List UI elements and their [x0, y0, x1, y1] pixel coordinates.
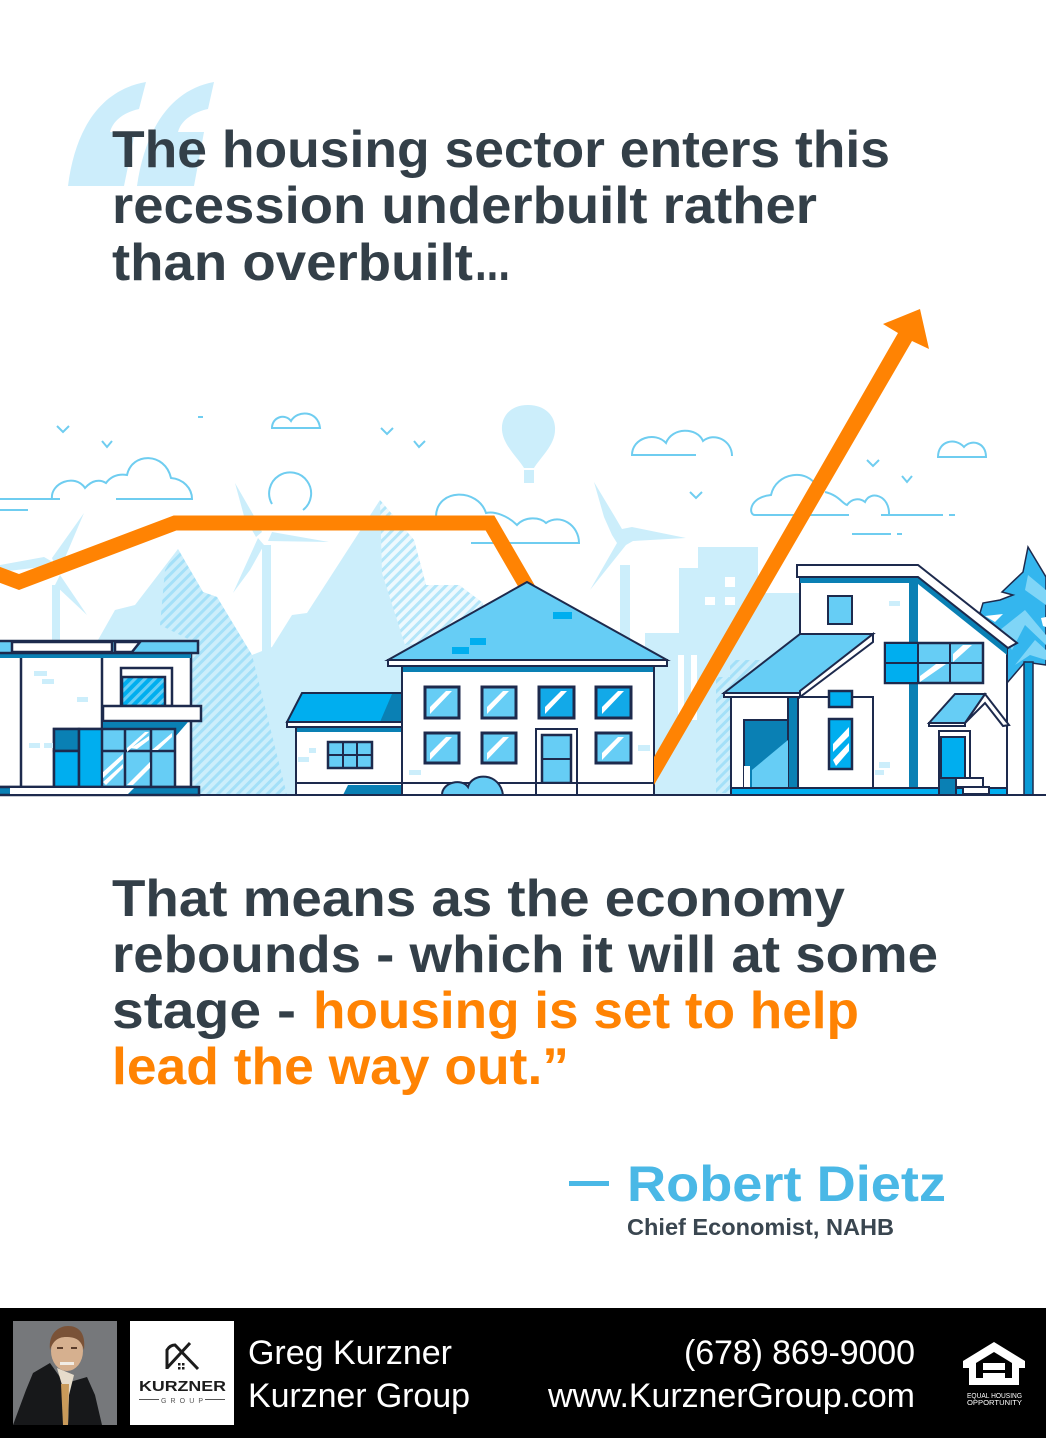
flat roof — [0, 641, 198, 653]
building: center house — [388, 582, 667, 795]
icon: equal housing opportunity — [963, 1342, 1025, 1407]
heading quote: The housing sector enters this — [112, 121, 890, 179]
hot air balloon — [502, 405, 555, 483]
chart arrow: rising trend — [654, 309, 929, 785]
icon: equal housing opportunity: EQUAL HOUSING — [967, 1391, 1022, 1400]
attribution: Chief Economist, NAHB — [627, 1214, 894, 1240]
contact details: www.KurznerGroup.com — [547, 1377, 915, 1415]
narrow windows — [829, 691, 852, 769]
agent photo — [13, 1321, 117, 1425]
clouds and sun — [0, 413, 986, 543]
company logo: GROUP — [161, 1398, 203, 1405]
bush — [442, 777, 503, 795]
illustration: skyline background — [0, 405, 986, 795]
agent name: Kurzner Group — [248, 1377, 470, 1415]
building: small side house — [287, 693, 402, 795]
side house window — [328, 742, 372, 768]
porch roof — [724, 634, 873, 697]
heading quote — [112, 121, 890, 292]
small porch — [929, 694, 1009, 788]
lower block — [731, 697, 873, 795]
body quote: rebounds - which it will at some — [112, 926, 938, 984]
chart line: falling trend — [0, 523, 530, 592]
footer bar — [0, 1308, 1046, 1438]
heading quote: recession underbuilt rather — [112, 177, 817, 235]
entry door — [744, 720, 788, 788]
roof tiles — [452, 612, 572, 654]
heading quote: ... — [475, 234, 510, 292]
body quote — [112, 870, 938, 1096]
front door — [536, 729, 577, 795]
building: right modern house — [724, 565, 1017, 795]
mountains — [98, 500, 500, 795]
attribution — [569, 1156, 946, 1240]
attribution: Robert Dietz — [627, 1156, 946, 1212]
highlighted conclusion — [112, 982, 859, 1096]
walls — [0, 653, 191, 787]
decorative opening quotation mark — [68, 82, 214, 186]
agent name — [248, 1334, 470, 1415]
main sloped roof — [797, 565, 1017, 648]
body quote: That means as the economy — [112, 870, 845, 928]
windows — [425, 687, 631, 763]
window band — [885, 643, 983, 683]
highlighted conclusion: housing is set to help — [313, 982, 859, 1040]
contact details: (678) 869-9000 — [684, 1334, 915, 1372]
upper window — [828, 596, 852, 624]
heading quote: than overbuilt — [112, 234, 473, 292]
building: left modern house — [0, 641, 201, 795]
base — [0, 787, 199, 795]
upper window — [121, 668, 172, 706]
logo mark — [167, 1343, 198, 1369]
body quote: stage - — [112, 982, 296, 1040]
storefront window — [54, 729, 175, 787]
tree — [980, 547, 1046, 795]
main pitched roof — [388, 582, 667, 660]
icon: equal housing opportunity: OPPORTUNITY — [967, 1398, 1022, 1407]
wind turbines — [0, 482, 686, 653]
contact details — [547, 1334, 915, 1415]
company logo — [130, 1321, 234, 1425]
highlighted conclusion: lead the way out.” — [112, 1038, 569, 1096]
company logo: KURZNER — [139, 1378, 226, 1395]
agent name: Greg Kurzner — [248, 1334, 452, 1372]
city buildings — [645, 547, 800, 795]
balcony — [103, 706, 201, 721]
ground line — [0, 794, 1046, 796]
foundation and steps — [731, 778, 1007, 795]
birds — [57, 426, 912, 498]
